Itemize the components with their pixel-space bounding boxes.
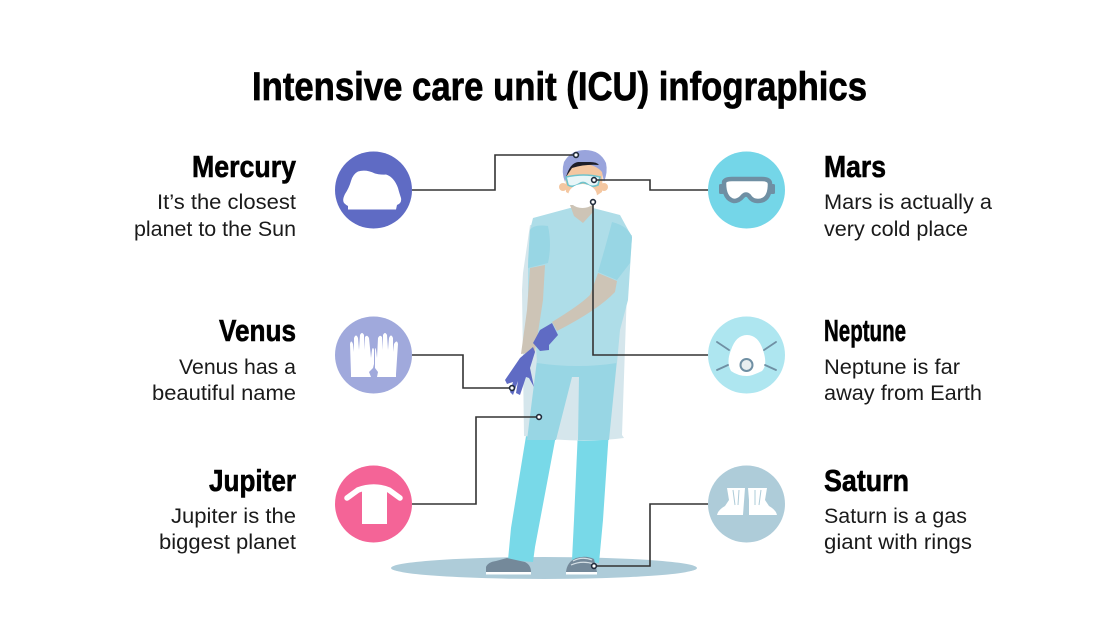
text block: Jupiter: biggest planet <box>159 531 296 554</box>
icon: Neptune respirator <box>708 316 785 394</box>
text block: Saturn: Saturn is a gas <box>824 505 967 528</box>
text block: Mercury: planet to the Sun <box>134 218 296 241</box>
connector: Neptune to mask <box>591 200 708 355</box>
surgical cap <box>563 150 607 182</box>
text block: Neptune: Neptune <box>824 313 906 348</box>
text block: Mars <box>824 149 992 241</box>
ears <box>559 183 608 191</box>
hair line <box>566 162 599 177</box>
connector: Saturn to shoe <box>592 504 708 568</box>
text block: Venus: Venus has a <box>179 356 296 379</box>
arms <box>521 265 617 354</box>
scrub top <box>528 208 632 366</box>
connector: Mars to goggles <box>592 178 708 190</box>
text block: Mercury <box>134 149 297 241</box>
text block: Mercury: It’s the closest <box>157 191 296 214</box>
text block: Saturn: Saturn <box>824 463 909 498</box>
text block: Mars: very cold place <box>824 218 968 241</box>
figure: medical worker in protective equipment <box>391 150 697 579</box>
text block: Mars: Mars <box>824 149 886 184</box>
text block: Venus: beautiful name <box>152 382 296 405</box>
text block: Mars: Mars is actually a <box>824 191 992 214</box>
text block: Venus <box>152 313 296 405</box>
face mask <box>568 184 597 208</box>
text block: Neptune: away from Earth <box>824 382 982 405</box>
text block: Mercury: Mercury <box>192 149 297 184</box>
text block: Saturn <box>824 463 972 554</box>
floor shadow <box>391 557 697 579</box>
text block: Neptune: Neptune is far <box>824 356 960 379</box>
goggles <box>566 175 600 186</box>
legs <box>508 430 609 563</box>
connector: Venus to glove <box>412 355 514 390</box>
icon: Venus gloves <box>335 316 412 394</box>
gloves <box>505 323 558 395</box>
shoes <box>486 557 597 574</box>
title: Intensive care unit (ICU) infographics <box>252 65 867 109</box>
text block: Jupiter: Jupiter <box>209 463 296 498</box>
connector: Jupiter to gown <box>412 415 541 504</box>
text block: Venus: Venus <box>219 313 296 348</box>
connector: Mercury to cap <box>412 153 578 190</box>
trousers upper <box>527 360 617 440</box>
text block: Jupiter: Jupiter is the <box>171 505 296 528</box>
neck <box>570 205 593 223</box>
icon: Jupiter gown <box>335 466 412 542</box>
text block: Saturn: giant with rings <box>824 531 972 554</box>
face <box>565 160 603 198</box>
text block: Neptune <box>824 313 982 405</box>
sleeves <box>528 222 632 280</box>
text block: Jupiter <box>159 463 296 554</box>
transparent gown <box>522 225 632 441</box>
icon: Saturn boot covers <box>708 466 785 542</box>
icon: Mercury surgical cap <box>335 152 412 228</box>
icon: Mars goggles <box>708 152 785 228</box>
